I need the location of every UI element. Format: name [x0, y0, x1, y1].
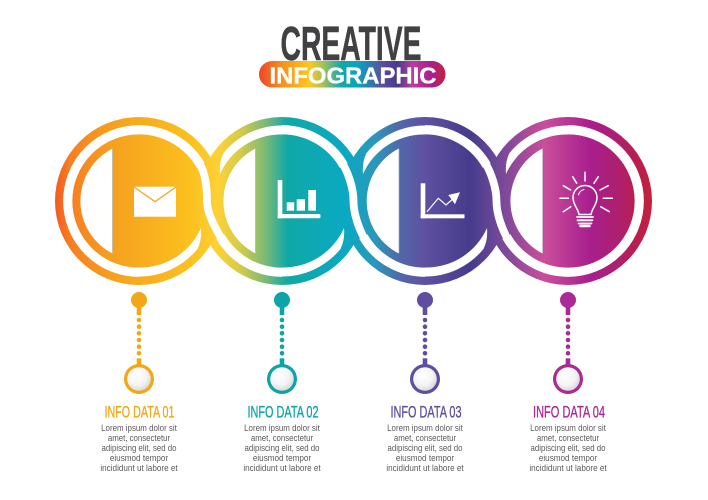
text block 3: INFO DATA 03	[390, 403, 462, 422]
subtitle pill: INFOGRAPHIC: INFOGRAPHIC	[270, 62, 436, 88]
gradient circle bodies	[55, 117, 652, 285]
text block 1: INFO DATA 01	[104, 403, 174, 422]
text block 1: Lorem ipsum dolor sit	[101, 423, 177, 433]
text block 3: adipiscing elit, sed do	[388, 443, 462, 453]
tapered white channel ends	[139, 125, 568, 277]
white channels between rings and discs	[68, 130, 639, 272]
S-curve channels at crossings	[200, 164, 507, 238]
text block 4: Lorem ipsum dolor sit	[530, 423, 606, 433]
text block 2: INFO DATA 02	[248, 403, 318, 422]
connector 2	[267, 292, 297, 394]
text block 2: eiusmod tempor	[253, 453, 311, 463]
text block 2: incididunt ut labore et	[243, 463, 321, 473]
text block 3	[386, 403, 464, 473]
text block 2	[243, 403, 321, 473]
interlocked circle chain	[55, 117, 652, 285]
text block 1: amet, consectetur	[108, 433, 170, 443]
text block 3: amet, consectetur	[394, 433, 456, 443]
text block 1: eiusmod tempor	[110, 453, 168, 463]
text block 4	[529, 403, 607, 473]
text block 1: incididunt ut labore et	[100, 463, 178, 473]
connector 1	[124, 292, 154, 394]
text block 1	[100, 403, 178, 473]
text block 2: Lorem ipsum dolor sit	[244, 423, 320, 433]
icon: envelope	[134, 187, 176, 217]
icon: bar chart	[278, 180, 320, 218]
text block 3: Lorem ipsum dolor sit	[387, 423, 463, 433]
text block 2: amet, consectetur	[251, 433, 313, 443]
text block 4: adipiscing elit, sed do	[530, 443, 606, 453]
text block 4: eiusmod tempor	[539, 453, 597, 463]
connector 4	[553, 292, 583, 394]
text block 3: incididunt ut labore et	[386, 463, 464, 473]
connector 3	[410, 292, 440, 394]
text block 3: eiusmod tempor	[396, 453, 454, 463]
text block 4: incididunt ut labore et	[529, 463, 607, 473]
text block 1: adipiscing elit, sed do	[102, 443, 176, 453]
text block 2: adipiscing elit, sed do	[244, 443, 320, 453]
icon: growth chart	[421, 183, 464, 218]
title: CREATIVE: CREATIVE	[280, 18, 422, 71]
text block 4: amet, consectetur	[537, 433, 599, 443]
icon: light bulb	[560, 172, 612, 226]
white disc segments	[80, 148, 542, 254]
text block 4: INFO DATA 04	[533, 403, 605, 422]
